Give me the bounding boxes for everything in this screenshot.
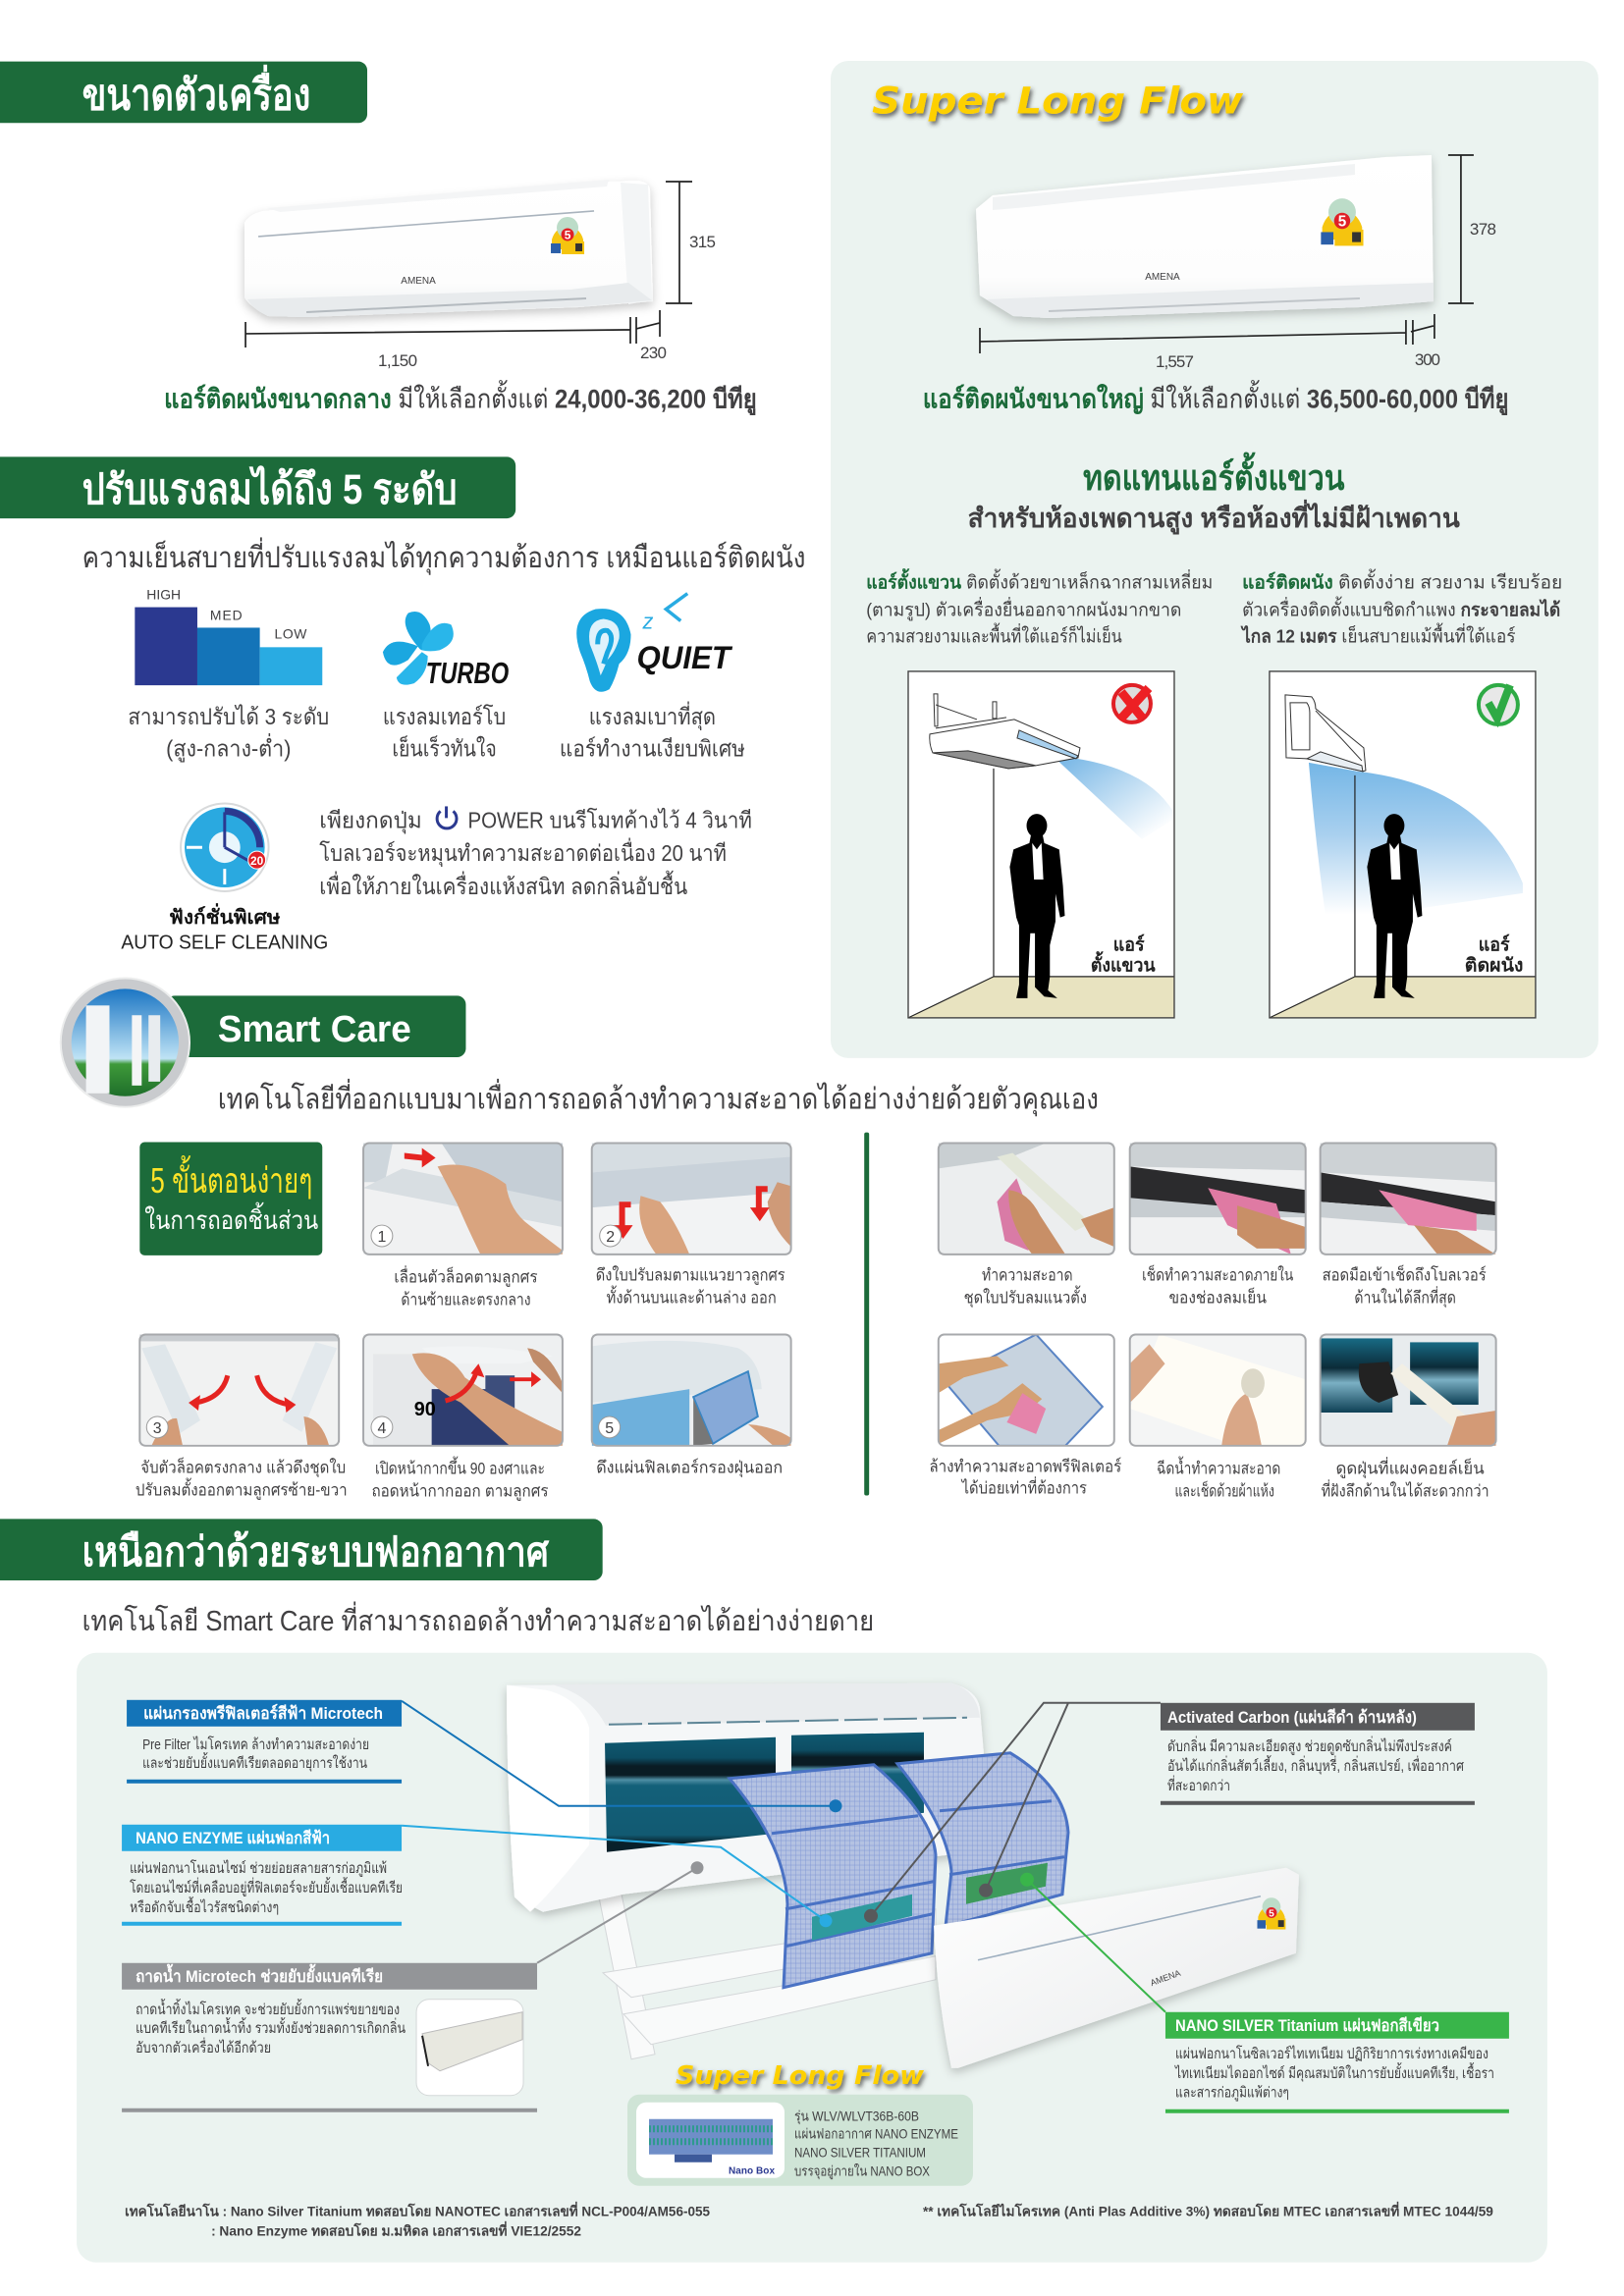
photo step 2 — [591, 1143, 791, 1255]
front panel — [934, 1868, 1299, 2068]
step 3 frame: 3 — [153, 1420, 162, 1437]
leader: activated carbon — [871, 1703, 1161, 1916]
room label: wall: แอร์ — [1479, 934, 1510, 956]
callout: drain pan: แบคทีเรียในถาดน้ำทิ้ง รวมทั้งยังช่วยลดการเกิดกลิ่น — [135, 2017, 406, 2037]
room label: ceiling: ตั้งแขวน — [1091, 951, 1156, 977]
callout: nano silver — [1165, 2012, 1509, 2113]
caption clean blower: สอดมือเข้าเช็ดถึงโบลเวอร์ — [1323, 1265, 1487, 1285]
dimension labels large: 300 — [1415, 350, 1440, 369]
replacement heading — [968, 452, 1460, 535]
icon: turbo: TURBO — [426, 656, 509, 690]
text: ceiling type — [866, 568, 1213, 647]
callout: drain pan: ถาดน้ำ Microtech ช่วยยับยั้งแบคทีเรีย — [135, 1963, 383, 1986]
step 1 caption: ด้านซ้ายและตรงกลาง — [401, 1291, 531, 1309]
caption clean vane: ชุดใบปรับลมแนวตั้ง — [964, 1286, 1087, 1308]
step 5 frame: 5 — [605, 1420, 614, 1437]
icon: quiet — [576, 594, 733, 692]
step 5 frame — [592, 1334, 791, 1446]
caption wash panel: และเช็ดด้วยผ้าแห้ง — [1174, 1481, 1274, 1501]
header: purification — [0, 1519, 603, 1580]
photo clean blower frame — [1321, 1144, 1496, 1255]
callout: drain pan: ถาดน้ำทิ้งไมโครเทค จะช่วยยับยั้งการแพร่ขยายของ — [135, 1999, 400, 2018]
callout: activated carbon — [1161, 1703, 1475, 1805]
nano box card: บรรจุอยู่ภายใน NANO BOX — [794, 2163, 931, 2180]
filter left — [730, 1765, 936, 1988]
air conditioner large: AMENA — [1145, 272, 1180, 283]
step 1 frame — [363, 1144, 563, 1255]
caption clean vane: ทำความสะอาด — [982, 1266, 1073, 1285]
leader: nano silver — [1027, 1880, 1165, 2012]
header: purification: เหนือกว่าด้วยระบบฟอกอากาศ — [82, 1528, 549, 1575]
air conditioner large — [976, 155, 1434, 318]
step 3 caption — [135, 1458, 348, 1501]
photo wash panel — [1130, 1335, 1306, 1445]
callout: pre filter: Pre Filter ไมโครเทค ล้างทำความสะอาดง่าย — [142, 1735, 369, 1753]
bar chart: fan levels: MED — [210, 607, 243, 622]
marker: nano enzyme — [819, 1914, 832, 1927]
markers: activated carbon — [864, 1884, 993, 1923]
callout: nano silver: และสารก่อภูมิแพ้ต่างๆ — [1175, 2085, 1289, 2102]
dimension lines large — [980, 155, 1474, 353]
step 1 caption — [394, 1265, 538, 1309]
photo clean vent — [1129, 1143, 1306, 1255]
step 2 caption: ดึงใบปรับลมตามแนวยาวลูกศร — [596, 1265, 785, 1286]
room label: ceiling: แอร์ — [1113, 934, 1145, 956]
icon: recommended — [1479, 685, 1518, 724]
photo wash panel frame — [1130, 1334, 1306, 1446]
self cleaning description: เพื่อให้ภายในเครื่องแห้งสนิท ลดกลิ่นอับชื้น — [319, 871, 688, 899]
photo step 3 — [139, 1335, 339, 1445]
photo step 4 — [363, 1335, 563, 1446]
leader: drain pan — [537, 1868, 697, 1963]
photo clean vane frame — [939, 1144, 1114, 1255]
room diagrams — [908, 671, 1536, 1018]
marker: pre filter — [829, 1799, 841, 1812]
room label: wall — [1465, 934, 1523, 977]
photo clean vent frame — [1130, 1144, 1306, 1255]
wall unit — [1285, 695, 1366, 772]
purification subtitle: เทคโนโลยี Smart Care ที่สามารถถอดล้างทำความสะอาดได้อย่างง่ายดาย — [82, 1601, 874, 1637]
callout: 5 easy steps: 5 ขั้นตอนง่ายๆ — [150, 1155, 312, 1201]
filter right — [897, 1753, 1068, 1927]
replacement heading: ทดแทนแอร์ตั้งแขวน — [1083, 452, 1345, 498]
photo step 4: 90 — [414, 1399, 436, 1420]
caption vacuum coil — [1322, 1457, 1489, 1501]
person — [1009, 814, 1064, 998]
callout: 5 easy steps — [139, 1143, 322, 1255]
step 4 caption: เปิดหน้ากากขึ้น 90 องศาและ — [375, 1457, 545, 1478]
step 3 frame — [139, 1334, 339, 1446]
vanes — [599, 1895, 936, 2059]
text: wall type — [1240, 569, 1562, 647]
room label: ceiling — [1091, 934, 1156, 977]
fan level caption: สามารถปรับได้ 3 ระดับ — [128, 704, 329, 729]
quiet caption: แอร์ทำงานเงียบพิเศษ — [560, 736, 745, 762]
large unit caption: แอร์ติดผนังขนาดใหญ่ มีให้เลือกตั้งแต่ 36,500-60,000 บีทียู — [923, 381, 1509, 416]
photo: drain pan — [416, 2000, 523, 2096]
header: unit size — [0, 62, 367, 123]
icon: self cleaning clock — [181, 803, 269, 891]
text: wall type: แอร์ติดผนัง ติดตั้งง่าย สวยงาม เรียบร้อย — [1242, 569, 1562, 594]
icon: quiet: z — [641, 609, 653, 633]
smart care medallion — [61, 978, 189, 1107]
text: wall type: ไกล 12 เมตร เย็นสบายแม้พื้นที่ใต้แอร์ — [1240, 622, 1516, 647]
nano box card — [627, 2095, 973, 2186]
step 5 caption: ดึงแผ่นฟิลเตอร์กรองฝุ่นออก — [596, 1459, 783, 1478]
self cleaning label — [121, 902, 328, 954]
self cleaning description — [319, 806, 752, 899]
caption wash filter — [929, 1458, 1121, 1498]
dimension labels medium — [378, 233, 716, 370]
nano box card: NANO SILVER TITANIUM — [794, 2145, 926, 2161]
icon: turbo — [383, 612, 509, 690]
air conditioner exploded view — [507, 1683, 1299, 2068]
room diagram: wall unit — [1270, 671, 1536, 1018]
nano box image — [649, 2119, 773, 2163]
column divider — [864, 1133, 869, 1496]
photo clean blower — [1320, 1143, 1496, 1255]
step 1 caption: เลื่อนตัวล็อคตามลูกศร — [394, 1265, 538, 1288]
nano box card: Nano Box — [729, 2166, 775, 2177]
photo vacuum coil — [1320, 1335, 1496, 1446]
header: smart care — [166, 995, 465, 1057]
caption vacuum coil: ที่ฝังลึกด้านในได้สะดวกกว่า — [1322, 1479, 1489, 1501]
icon: quiet: QUIET — [636, 639, 733, 675]
unit body — [507, 1683, 984, 1912]
callout: pre filter: และช่วยยับยั้งแบคทีเรียตลอดอายุการใช้งาน — [142, 1752, 367, 1773]
caption wash panel — [1157, 1457, 1280, 1501]
bar chart: fan levels: HIGH — [146, 587, 181, 603]
smart care subtitle: เทคโนโลยีที่ออกแบบมาเพื่อการถอดล้างทำความสะอาดได้อย่างง่ายด้วยตัวคุณเอง — [218, 1079, 1099, 1117]
footnote right: ** เทคโนโลยีไมโครเทค (Anti Plas Additive 3%) ทดสอบโดย MTEC เอกสารเลขที่ MTEC 1044/59 — [923, 2202, 1493, 2219]
marker: drain pan — [691, 1861, 704, 1874]
fan level caption — [128, 704, 329, 763]
photo wash filter — [939, 1335, 1104, 1445]
marker: nano silver — [1020, 1873, 1034, 1887]
step 2 frame — [592, 1144, 791, 1255]
callout: activated carbon: ดับกลิ่น มีความละเอียดสูง ช่วยดูดซับกลิ่นไม่พึงประสงค์ — [1167, 1735, 1452, 1755]
self cleaning label: ฟังก์ชั่นพิเศษ — [169, 902, 281, 929]
caption clean blower: ด้านในได้ลึกที่สุด — [1354, 1286, 1456, 1308]
step 3 caption: ปรับลมตั้งออกตามลูกศรซ้าย-ขวา — [135, 1478, 348, 1501]
caption clean blower — [1323, 1265, 1487, 1308]
callout: nano silver: NANO SILVER Titanium แผ่นฟอกสีเขียว — [1175, 2015, 1439, 2035]
turbo caption: เย็นเร็วทันใจ — [392, 734, 497, 762]
callout: activated carbon: อันได้แก่กลิ่นสัตว์เลี้ยง, กลิ่นบุหรี่, กลิ่นสเปรย์, เพื่ออากาศ — [1167, 1755, 1464, 1776]
callout: activated carbon: Activated Carbon (แผ่นสีดำ ด้านหลัง) — [1167, 1707, 1417, 1727]
air conditioner exploded view: AMENA — [1149, 1968, 1182, 1988]
quiet caption — [560, 701, 745, 762]
callout: nano enzyme: โดยเอนไซม์ที่เคลือบอยู่ที่ฟิลเตอร์จะยับยั้งเชื้อแบคทีเรีย — [130, 1877, 403, 1896]
step 4 frame: 4 — [378, 1420, 387, 1437]
callout: drain pan — [122, 1963, 537, 2112]
photo step 5 — [591, 1335, 791, 1446]
person — [1367, 814, 1422, 998]
icon: self cleaning clock: 20 — [250, 854, 264, 868]
photo vacuum coil frame — [1321, 1334, 1496, 1446]
turbo caption: แรงลมเทอร์โบ — [383, 704, 506, 729]
fan level caption: (สูง-กลาง-ต่ำ) — [166, 733, 291, 763]
leader: nano enzyme — [402, 1826, 826, 1921]
text: wall type: ตัวเครื่องติดตั้งแบบชิดกำแพง กระจายลมได้ — [1242, 597, 1560, 621]
header: fan levels — [0, 456, 515, 518]
caption wash filter: ได้บ่อยเท่าที่ต้องการ — [960, 1476, 1087, 1498]
callout: activated carbon: ที่สะอาดกว่า — [1167, 1775, 1230, 1794]
bar chart: fan levels — [135, 587, 322, 685]
caption clean vent: ของช่องลมเย็น — [1168, 1288, 1267, 1308]
panel: purification — [77, 1653, 1547, 2263]
callout: nano silver: แผ่นฟอกนาโนซิลเวอร์ไทเทเนียม ปฏิกิริยาการเร่งทางเคมีของ — [1175, 2045, 1489, 2062]
step 2 caption: ทั้งด้านบนและด้านล่าง ออก — [607, 1286, 777, 1308]
air conditioner medium — [244, 180, 653, 317]
callout: nano enzyme: หรือดักจับเชื้อไวรัสชนิดต่างๆ — [130, 1896, 279, 1916]
header: smart care: Smart Care — [218, 1009, 411, 1050]
self cleaning description: โบลเวอร์จะหมุนทำความสะอาดต่อเนื่อง 20 นาที — [319, 837, 727, 867]
self cleaning description: เพียงกดปุ่ม — [319, 807, 422, 833]
step 4 caption: ถอดหน้ากากออก ตามลูกศร — [371, 1482, 548, 1502]
nano box card: แผ่นฟอกอากาศ NANO ENZYME — [794, 2126, 958, 2142]
photo clean vane — [939, 1143, 1113, 1255]
callout: pre filter — [127, 1700, 402, 1784]
medium unit caption: แอร์ติดผนังขนาดกลาง มีให้เลือกตั้งแต่ 24,000-36,200 บีทียู — [164, 381, 757, 416]
step 2 frame: 2 — [606, 1229, 615, 1246]
dimension labels large — [1156, 220, 1496, 371]
header: fan levels: ปรับแรงลมได้ถึง 5 ระดับ — [82, 464, 458, 513]
ceiling unit — [930, 694, 1080, 769]
caption clean vane — [964, 1266, 1087, 1308]
dimension labels medium: 1,150 — [378, 351, 417, 370]
icon: not recommended — [1113, 685, 1151, 722]
photo step 1 — [363, 1143, 563, 1255]
footnote left: เทคโนโลยีนาโน : Nano Silver Titanium ทดสอบโดย NANOTEC เอกสารเลขที่ NCL-P004/AM56-055 — [125, 2202, 710, 2219]
caption vacuum coil: ดูดฝุ่นที่แผงคอยล์เย็น — [1336, 1457, 1485, 1479]
dimension lines medium — [245, 182, 692, 347]
caption wash filter: ล้างทำความสะอาดพรีฟิลเตอร์ — [929, 1458, 1121, 1476]
dimension labels medium: 315 — [689, 233, 716, 251]
text: ceiling type: (ตามรูป) ตัวเครื่องยื่นออกจากผนังมากขาด — [866, 597, 1181, 621]
dimension labels medium: 230 — [640, 344, 667, 362]
leader: pre filter — [402, 1701, 836, 1806]
coil — [605, 1737, 776, 1852]
air conditioner medium: AMENA — [401, 276, 436, 287]
callout: nano enzyme: NANO ENZYME แผ่นฟอกสีฟ้า — [135, 1828, 330, 1847]
turbo caption — [383, 704, 506, 762]
room diagram: ceiling unit — [908, 671, 1174, 1018]
callout: nano enzyme: แผ่นฟอกนาโนเอนไซม์ ช่วยย่อยสลายสารก่อภูมิแพ้ — [130, 1859, 387, 1877]
self cleaning description: POWER บนรีโมทค้างไว้ 4 วินาที — [467, 807, 752, 832]
super long flow logo small: Super Long Flow — [676, 2061, 925, 2091]
room label: wall: ติดผนัง — [1465, 956, 1523, 977]
quiet caption: แรงลมเบาที่สุด — [589, 701, 716, 730]
fan level subtitle: ความเย็นสบายที่ปรับแรงลมได้ทุกความต้องการ เหมือนแอร์ติดผนัง — [82, 537, 806, 575]
callout: nano silver: ไทเทเนียมไดออกไซด์ มีคุณสมบัติในการยับยั้งแบคทีเรีย, เชื้อรา — [1174, 2062, 1494, 2083]
step 3 caption: จับตัวล็อคตรงกลาง แล้วดึงชุดใบ — [140, 1458, 346, 1478]
footnote left: : Nano Enzyme ทดสอบโดย ม.มหิดล เอกสารเลขที่ VIE12/2552 — [211, 2221, 581, 2239]
unit illustrations and dimensions — [244, 61, 1598, 1058]
callout: 5 easy steps: ในการถอดชิ้นส่วน — [144, 1202, 319, 1235]
replacement heading: สำหรับห้องเพดานสูง หรือห้องที่ไม่มีฝ้าเพดาน — [968, 499, 1460, 535]
step 4 frame — [363, 1334, 563, 1446]
dimension labels large: 1,557 — [1156, 352, 1194, 371]
photo wash filter frame — [939, 1334, 1114, 1446]
super long flow logo: Super Long Flow — [872, 79, 1243, 122]
panel: super long flow background — [831, 61, 1598, 1058]
caption clean vent — [1142, 1265, 1294, 1308]
step 2 caption — [596, 1265, 785, 1308]
header: unit size: ขนาดตัวเครื่อง — [82, 64, 310, 119]
footnote left — [125, 2202, 710, 2239]
self cleaning label: AUTO SELF CLEANING — [121, 933, 328, 954]
nano box card: รุ่น WLV/WLVT36B-60B — [794, 2109, 919, 2125]
step 1 frame: 1 — [378, 1229, 387, 1246]
caption wash panel: ฉีดน้ำทำความสะอาด — [1157, 1457, 1280, 1478]
step 4 caption — [371, 1457, 548, 1502]
dimension labels large: 378 — [1470, 220, 1496, 239]
callout: nano enzyme — [122, 1825, 403, 1926]
callout: drain pan: อับจากตัวเครื่องได้อีกด้วย — [135, 2037, 271, 2056]
caption clean vent: เช็ดทำความสะอาดภายใน — [1142, 1265, 1294, 1285]
text: ceiling type: ความสวยงามและพื้นที่ใต้แอร์ก็ไม่เย็น — [866, 622, 1122, 647]
text: ceiling type: แอร์ตั้งแขวน ติดตั้งด้วยขาเหล็กฉากสามเหลี่ยม — [866, 568, 1213, 594]
bar chart: fan levels: LOW — [275, 625, 307, 641]
callout: pre filter: แผ่นกรองพรีฟิลเตอร์สีฟ้า Microtech — [143, 1703, 383, 1723]
